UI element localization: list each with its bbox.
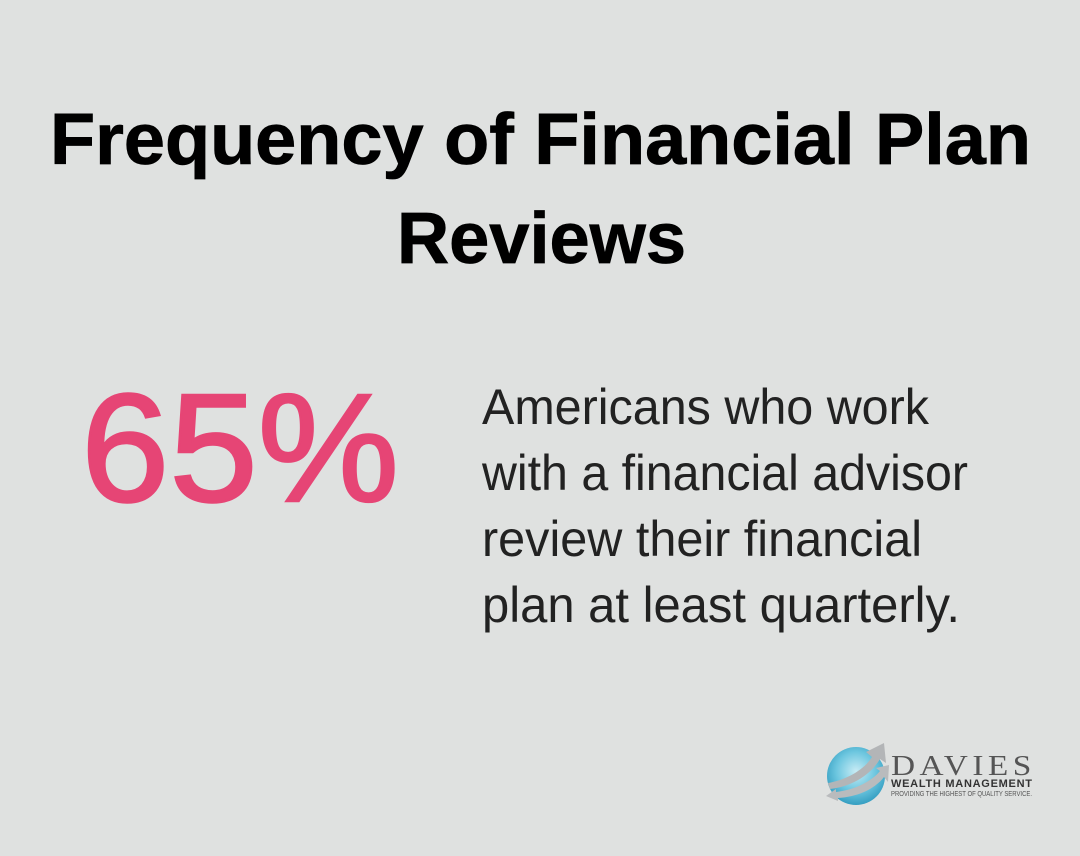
description text: review their financial	[482, 511, 922, 567]
wordmark: DAVIES	[891, 749, 1031, 781]
description text: Americans who work	[482, 379, 930, 435]
statistic: 65%: 65%	[81, 362, 399, 534]
description text: plan at least quarterly.	[482, 577, 960, 633]
title	[50, 100, 1031, 279]
description text: with a financial advisor	[481, 445, 968, 501]
logo: Davies Wealth Management	[826, 743, 1032, 805]
title: Frequency of Financial Plan	[50, 100, 1031, 180]
title: Reviews	[397, 199, 686, 279]
description text	[481, 379, 968, 633]
icon: globe with arrows	[826, 743, 889, 805]
tagline: PROVIDING THE HIGHEST OF QUALITY SERVICE.	[891, 791, 1032, 798]
wordmark subtitle: WEALTH MANAGEMENT	[891, 778, 1032, 790]
